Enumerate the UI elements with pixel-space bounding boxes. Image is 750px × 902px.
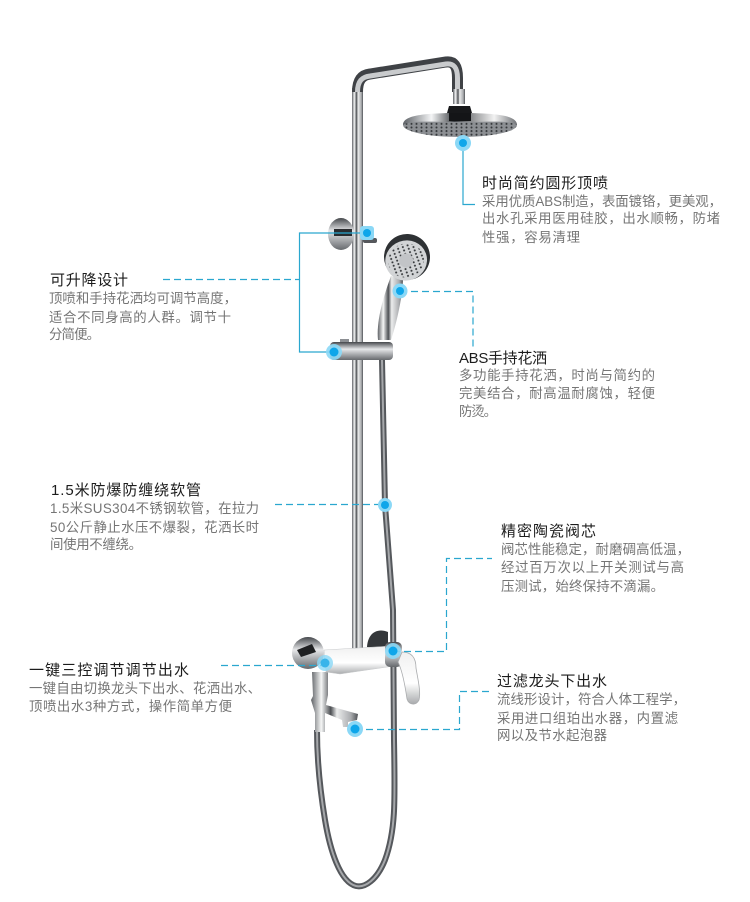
callout: ABS hand shower: ABS手持花洒 — [459, 350, 547, 367]
overhead shower head — [403, 89, 517, 137]
callout: hose: 1.5米防爆防缠绕软管 — [51, 481, 201, 499]
callout: ABS hand shower: 多功能手持花洒，时尚与简约的 — [459, 367, 655, 383]
mixer valve and spout — [292, 630, 420, 732]
callout: overhead shower — [482, 175, 722, 245]
callout connector lines — [163, 143, 492, 730]
callout: lifting design: 适合不同身高的人群。调节十 — [49, 309, 231, 325]
hose — [317, 360, 395, 886]
callout: faucet outlet: 过滤龙头下出水 — [497, 673, 607, 690]
callout: faucet outlet — [497, 673, 686, 743]
callout: hose: 50公斤静止水压不爆裂，花洒长时 — [50, 520, 259, 535]
callout: ceramic valve — [501, 523, 690, 594]
callout: ceramic valve: 压测试，始终保持不滴漏。 — [501, 578, 664, 594]
callout: lifting design: 顶喷和手持花洒均可调节高度， — [49, 290, 237, 306]
wall bracket and clip — [328, 218, 377, 250]
riser pipe and arm — [352, 62, 458, 640]
hand shower — [378, 228, 436, 340]
callout: faucet outlet: 流线形设计，符合人体工程学， — [497, 692, 686, 707]
callout: three-way control: 一键三控调节调节出水 — [29, 662, 189, 679]
callout dots — [317, 135, 471, 737]
callout: hose — [50, 481, 259, 552]
callout: overhead shower: 性强，容易清理 — [482, 229, 580, 245]
callout: faucet outlet: 采用进口组珀出水器，内置滤 — [497, 711, 678, 726]
callout: ABS hand shower: 防烫。 — [459, 404, 497, 419]
callout: three-way control: 一键自由切换龙头下出水、花洒出水、 — [29, 681, 261, 696]
callout: overhead shower: 时尚简约圆形顶喷 — [482, 175, 608, 192]
callout: ABS hand shower: 完美结合，耐高温耐腐蚀，轻便 — [459, 385, 655, 401]
callout: lifting design: 分简便。 — [49, 326, 100, 342]
callout: three-way control: 顶喷出水3种方式，操作简单方便 — [29, 698, 232, 714]
callout: lifting design — [49, 272, 237, 342]
callout: lifting design: 可升降设计 — [50, 272, 128, 289]
callout: hose: 间使用不缠绕。 — [50, 536, 142, 552]
callout: three-way control — [29, 662, 261, 714]
callout: ceramic valve: 精密陶瓷阀芯 — [501, 523, 596, 540]
callout: faucet outlet: 网以及节水起泡器 — [497, 728, 608, 743]
callout: hose: 1.5米SUS304不锈钢软管，在拉力 — [50, 501, 259, 516]
callout: ceramic valve: 阀芯性能稳定，耐磨碉高低温， — [501, 541, 690, 557]
callout: ABS hand shower — [459, 350, 655, 419]
slider — [330, 339, 393, 360]
callout: ceramic valve: 经过百万次以上开关测试与高 — [501, 559, 684, 575]
shower product illustration — [292, 62, 517, 886]
callout: overhead shower: 出水孔采用医用硅胶，出水顺畅，防堵 — [482, 210, 720, 226]
callout: overhead shower: 采用优质ABS制造，表面镀铬，更美观， — [482, 193, 722, 209]
